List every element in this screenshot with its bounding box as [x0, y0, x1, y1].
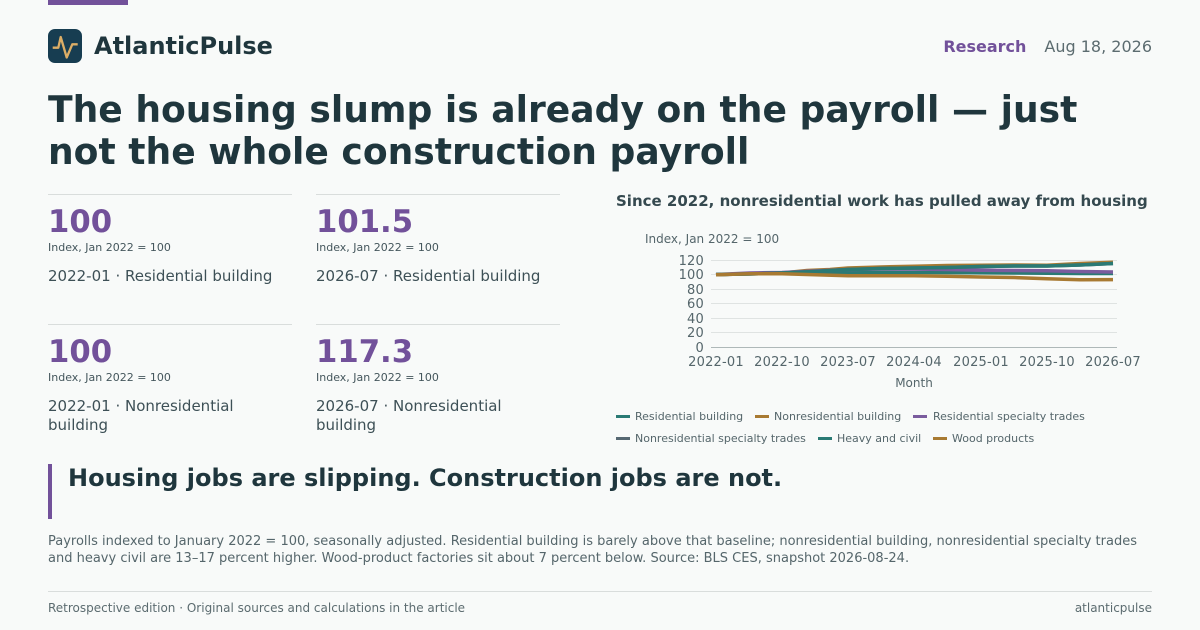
legend: nonresidential specialty trades: Nonresidential specialty trades — [635, 432, 806, 445]
y axis labels — [679, 254, 704, 356]
legend: wood products: Wood products — [952, 432, 1034, 445]
x axis labels: 2022-01 — [688, 355, 744, 370]
line: residential building — [716, 272, 1113, 275]
y axis labels: 20 — [687, 326, 704, 341]
x axis labels: 2024-04 — [886, 355, 942, 370]
title: The housing slump is already on the payroll — just — [48, 89, 1077, 131]
y axis labels: 120 — [679, 254, 704, 269]
line: nonresidential specialty trades — [716, 264, 1113, 274]
panel: KPI residential 2026 — [316, 194, 560, 315]
x axis labels: 2023-07 — [820, 355, 876, 370]
callout text: Housing jobs are slipping. Construction jobs are not. — [68, 464, 782, 492]
line: residential specialty trades — [716, 269, 1113, 274]
y axis labels: 80 — [687, 283, 704, 298]
panel: KPI residential 2026: 101.5 — [316, 205, 413, 240]
body note: and heavy civil are 13–17 percent higher. Wood-product factories sit about 7 percent below. Source: BLS CES, snapshot 2026-08-24. — [48, 551, 909, 566]
panel: KPI residential 2022: 2022-01 · Residential building — [48, 267, 272, 285]
body note — [48, 534, 1137, 566]
y axis labels: 40 — [687, 312, 704, 327]
panel: KPI nonresidential 2022: 2022-01 · Nonresidential — [48, 397, 234, 415]
y axis labels: 60 — [687, 297, 704, 312]
panel: KPI nonresidential 2026: Index, Jan 2022 = 100 — [316, 371, 439, 384]
legend: residential building: Residential building — [635, 410, 743, 423]
axis title: month: Month — [895, 376, 933, 390]
panel: KPI residential 2026: 2026-07 · Residential building — [316, 267, 540, 285]
x axis labels — [688, 355, 1141, 370]
y axis labels: 100 — [679, 268, 704, 283]
section and date: Research Aug 18, 2026 — [943, 37, 1152, 56]
panel: KPI nonresidential 2026: 2026-07 · Nonresidential — [316, 397, 502, 415]
legend — [616, 410, 1085, 445]
accent bar — [48, 0, 128, 5]
panel: KPI nonresidential 2022: building — [48, 416, 108, 434]
legend: nonresidential building: Nonresidential building — [774, 410, 901, 423]
y axis labels: 0 — [696, 341, 704, 356]
line: nonresidential building — [716, 262, 1113, 275]
title: not the whole construction payroll — [48, 131, 749, 173]
panel: KPI nonresidential 2022: Index, Jan 2022 = 100 — [48, 371, 171, 384]
panel: KPI nonresidential 2022 — [48, 324, 292, 445]
legend: heavy and civil: Heavy and civil — [837, 432, 921, 445]
icon: pulse logo — [48, 29, 82, 63]
panel: KPI residential 2022 — [48, 194, 292, 315]
panel: KPI residential 2026: Index, Jan 2022 = 100 — [316, 241, 439, 254]
x axis labels: 2025-01 — [953, 355, 1009, 370]
line: wood products — [716, 274, 1113, 280]
x axis labels: 2022-10 — [754, 355, 810, 370]
body note: Payrolls indexed to January 2022 = 100, seasonally adjusted. Residential building is barely above that baseline; nonresidential building, nonresidential specialty trades — [48, 534, 1137, 549]
x axis labels: 2026-07 — [1085, 355, 1141, 370]
callout — [48, 464, 782, 519]
title — [48, 89, 1077, 173]
panel: KPI residential 2022: 100 — [48, 205, 112, 240]
chart heading: Since 2022, nonresidential work has pulled away from housing — [616, 192, 1148, 210]
panel: KPI nonresidential 2026: 117.3 — [316, 335, 413, 370]
footer left: Retrospective edition · Original sources and calculations in the article — [48, 601, 465, 615]
line chart — [616, 232, 1141, 445]
panel: KPI nonresidential 2022: 100 — [48, 335, 112, 370]
panel: KPI nonresidential 2026: building — [316, 416, 376, 434]
axis title: index: Index, Jan 2022 = 100 — [645, 232, 779, 246]
brand — [48, 29, 273, 63]
panel: KPI residential 2022: Index, Jan 2022 = 100 — [48, 241, 171, 254]
legend: residential specialty trades: Residential specialty trades — [933, 410, 1085, 423]
footer right: atlanticpulse — [1075, 601, 1152, 615]
panel: KPI nonresidential 2026 — [316, 324, 560, 445]
line: heavy and civil — [716, 264, 1113, 274]
brand name: AtlanticPulse — [94, 32, 273, 60]
x axis labels: 2025-10 — [1019, 355, 1075, 370]
data lines — [716, 262, 1113, 280]
